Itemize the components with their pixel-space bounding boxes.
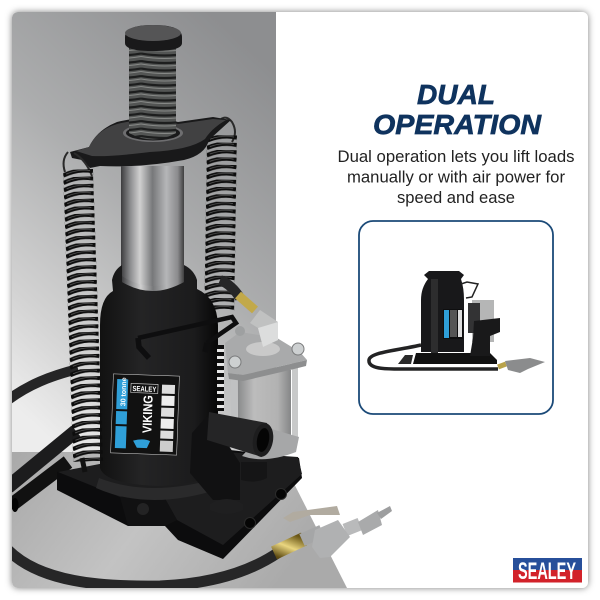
warning label: VIKING xyxy=(139,395,156,433)
carry handle xyxy=(138,317,236,358)
warning label: 30 tonne xyxy=(120,377,128,406)
handle tubes xyxy=(8,431,76,512)
heading: dual operation xyxy=(373,79,542,140)
base plate xyxy=(57,450,302,559)
warning label xyxy=(111,374,179,455)
pump socket xyxy=(190,412,274,500)
heading: dual operation: DUAL xyxy=(417,79,495,110)
inset trigger xyxy=(498,358,545,373)
rear spring segment near air cylinder xyxy=(217,349,224,408)
ram cap xyxy=(125,25,182,51)
left spring xyxy=(63,152,103,472)
heading: dual operation: OPERATION xyxy=(373,109,542,140)
description text: speed and ease xyxy=(397,189,515,207)
air cylinder xyxy=(225,310,307,482)
right spring xyxy=(204,118,237,310)
air line coupling and trigger xyxy=(274,506,392,558)
main product photo: bottle jack xyxy=(8,25,392,586)
inset panel: jack without extended ram xyxy=(359,221,553,414)
air hose fitting xyxy=(220,280,255,310)
warning label: SEALEY xyxy=(132,384,157,394)
inset hose xyxy=(369,345,498,369)
screw thread xyxy=(129,48,176,140)
polished ram xyxy=(121,166,184,290)
inset jack xyxy=(398,271,500,364)
description text: manually or with air power for xyxy=(347,168,566,186)
front air hose xyxy=(8,550,279,586)
description text xyxy=(338,148,574,207)
air hose behind jack xyxy=(8,369,78,400)
top plate xyxy=(70,117,231,168)
description text: Dual operation lets you lift loads xyxy=(338,148,574,166)
photo background: wall and floor xyxy=(12,12,347,588)
bottle body xyxy=(96,265,222,500)
